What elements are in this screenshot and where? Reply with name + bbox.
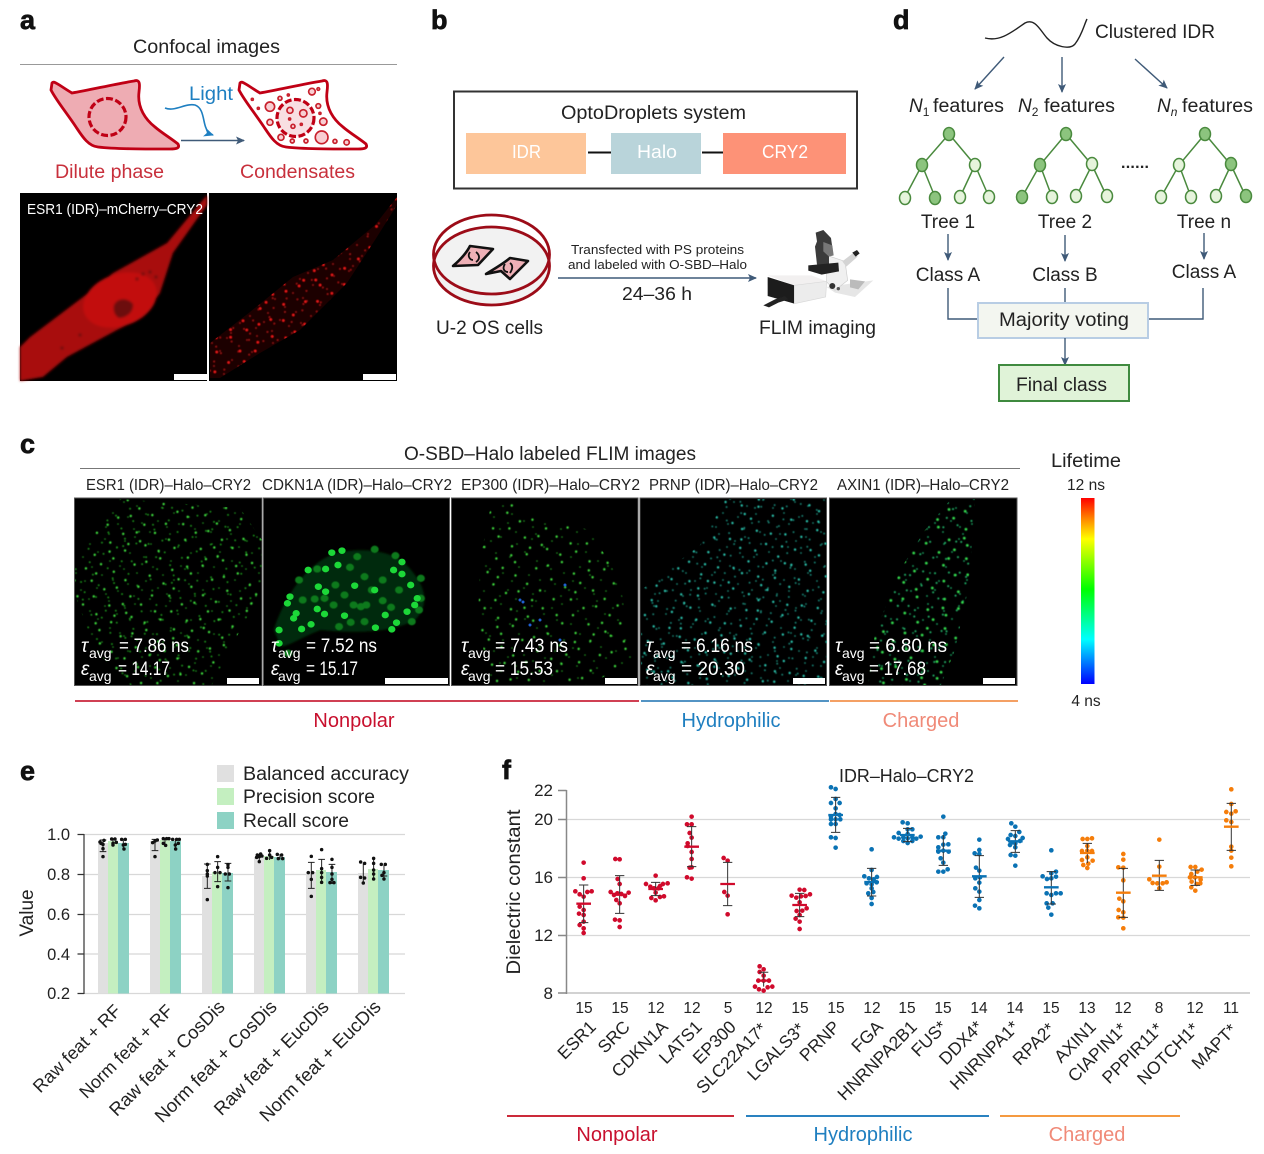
panel d: random forest workflow — [893, 5, 1253, 401]
x labels: EP300 — [689, 1017, 740, 1068]
stats: = 17.68 — [869, 659, 926, 680]
panel a: confocal images — [20, 5, 397, 381]
stats: = 7.52 ns — [306, 636, 377, 657]
x labels: SRC — [594, 1017, 634, 1057]
heading: Confocal images: Confocal images — [133, 37, 280, 58]
n labels: 13 — [1078, 1000, 1096, 1017]
feature labels: N — [1157, 96, 1171, 117]
y tick labels: 1.0 — [47, 826, 70, 844]
legend — [217, 764, 410, 832]
panel label b: b — [431, 5, 448, 35]
panel label c: c — [20, 429, 35, 459]
axis — [558, 790, 566, 994]
image column titles: PRNP (IDR)–Halo–CRY2 — [649, 477, 818, 494]
n labels: 5 — [724, 1000, 732, 1017]
x labels — [553, 1016, 1241, 1104]
box: final class: Final class — [1016, 375, 1107, 396]
stats — [835, 636, 947, 684]
stats: avg — [842, 668, 865, 684]
stats: = 15.17 — [306, 659, 358, 680]
x tick labels: Raw feat + RF — [29, 1001, 125, 1097]
caption: ESR1 mCherry: ESR1 (IDR)–mCherry–CRY2 — [27, 201, 203, 218]
feature labels — [909, 96, 1253, 119]
legend: Precision score — [243, 787, 375, 808]
stats: avg — [89, 668, 112, 684]
n labels: 14 — [970, 1000, 988, 1017]
scale bar — [793, 678, 825, 684]
stats: avg — [89, 645, 112, 661]
grid — [566, 820, 1250, 936]
heading: FLIM images: O-SBD–Halo labeled FLIM images — [404, 444, 696, 465]
tree 1 — [900, 128, 994, 204]
x labels: CDKN1A — [607, 1016, 672, 1081]
lifetime colour scale: 4 ns — [1071, 693, 1101, 710]
category bars: Nonpolar — [576, 1124, 658, 1146]
x labels: ESR1 — [553, 1017, 600, 1063]
system box: Halo — [637, 142, 677, 162]
x labels: PRNP — [795, 1017, 844, 1065]
panel label f: f — [502, 755, 512, 785]
image column titles: ESR1 (IDR)–Halo–CRY2 — [86, 477, 251, 494]
y tick labels: 20 — [534, 810, 553, 829]
ellipsis between trees: ...... — [1121, 155, 1149, 172]
panel b: OptoDroplets — [431, 5, 876, 339]
image: CDKN1A — [264, 498, 450, 686]
category bars: Hydrophilic — [814, 1124, 912, 1146]
n labels: 15 — [575, 1000, 593, 1017]
image: AXIN1 — [829, 498, 1017, 686]
arrow: to FLIM — [558, 277, 756, 279]
heading: OptoDroplets system: OptoDroplets system — [561, 103, 746, 124]
y tick labels — [47, 826, 70, 1003]
stats: = 20.30 — [681, 659, 745, 680]
x tick labels: Raw feat + EucDis — [209, 996, 333, 1119]
scale bar — [363, 374, 396, 380]
n labels: 15 — [791, 1000, 809, 1017]
n labels: 8 — [1155, 1000, 1163, 1017]
n labels: 15 — [898, 1000, 916, 1017]
x tick labels — [29, 996, 385, 1126]
icon: FLIM microscope — [763, 230, 873, 307]
stats: ε — [835, 659, 844, 680]
feature labels: n — [1171, 105, 1178, 119]
stats: = 6.80 ns — [869, 636, 947, 657]
bars — [98, 840, 389, 994]
n labels: 15 — [1042, 1000, 1060, 1017]
x labels: HNRNPA1* — [946, 1017, 1023, 1094]
image: condensates confocal — [209, 193, 397, 381]
y tick labels: 0.2 — [47, 985, 70, 1003]
x labels: NOTCH1* — [1133, 1019, 1203, 1089]
x tick labels: Norm feat + RF — [75, 1001, 177, 1102]
tree and class labels: Tree 1 — [921, 212, 975, 233]
y tick labels: 0.4 — [47, 946, 70, 964]
lifetime colour scale: 12 ns — [1067, 477, 1105, 494]
panel e: bar chart — [17, 756, 410, 1126]
system box — [454, 92, 857, 188]
x tick labels: Norm feat + EucDis — [255, 996, 385, 1126]
scale bar — [227, 678, 259, 684]
arrows: to features — [975, 57, 1167, 92]
icon: dilute phase cell — [51, 81, 179, 149]
hydrophilic swarm A — [828, 787, 879, 904]
y tick labels: 0.6 — [47, 906, 70, 924]
panel label d: d — [893, 5, 910, 35]
tree n — [1156, 128, 1252, 204]
n labels: 12 — [863, 1000, 881, 1017]
image: PRNP — [640, 498, 827, 686]
legend: Recall score — [243, 811, 349, 832]
tree and class labels — [916, 212, 1237, 286]
text: transfection — [568, 243, 747, 272]
image column titles: AXIN1 (IDR)–Halo–CRY2 — [837, 477, 1009, 494]
grid — [84, 834, 405, 994]
x labels: FGA — [847, 1016, 887, 1056]
x labels: LATS1 — [655, 1017, 706, 1068]
feature labels: N — [909, 96, 923, 117]
stats: = 15.53 — [495, 659, 553, 680]
stats: = 14.17 — [118, 659, 170, 680]
feature labels: N — [1018, 96, 1032, 117]
x labels: RPA2* — [1008, 1019, 1059, 1069]
x labels: FUS* — [907, 1017, 951, 1060]
error bars and data points — [100, 838, 387, 900]
stats — [271, 636, 377, 684]
stats: τ — [461, 636, 470, 657]
n labels: 12 — [1186, 1000, 1204, 1017]
x labels: CIAPIN1* — [1064, 1019, 1131, 1086]
stats — [81, 636, 189, 684]
category bars: Charged — [883, 710, 959, 732]
system box: IDR — [512, 142, 541, 162]
y axis title: Value — [17, 889, 38, 937]
y tick labels: 12 — [534, 926, 553, 945]
n labels: 11 — [1223, 1000, 1239, 1017]
lifetime colour scale — [1051, 451, 1121, 710]
feature labels: features — [1044, 96, 1115, 117]
stats: τ — [271, 636, 280, 657]
stats: ε — [461, 659, 470, 680]
x tick labels: Norm feat + CosDis — [150, 996, 281, 1126]
y tick labels: 22 — [534, 781, 553, 800]
x labels: MAPT* — [1187, 1020, 1241, 1073]
scale bar — [174, 374, 207, 380]
image column titles: CDKN1A (IDR)–Halo–CRY2 — [262, 477, 452, 494]
x labels: HNRNPA2B1 — [833, 1017, 921, 1104]
n labels: 12 — [1114, 1000, 1132, 1017]
legend: Balanced accuracy — [243, 764, 410, 785]
feature labels: 2 — [1032, 105, 1039, 119]
feature labels: features — [933, 96, 1004, 117]
image: EP300 — [451, 498, 638, 686]
icon: culture dish — [434, 215, 550, 305]
label: Dilute phase: Dilute phase — [55, 162, 164, 183]
feature labels: features — [1182, 96, 1253, 117]
image column titles: EP300 (IDR)–Halo–CRY2 — [461, 477, 640, 494]
tree and class labels: Tree 2 — [1038, 212, 1092, 233]
tree and class labels: Class A — [916, 265, 981, 286]
y tick labels: 16 — [534, 868, 553, 887]
box: majority voting — [978, 303, 1148, 338]
arrow: to final class — [1064, 338, 1066, 365]
n labels — [575, 1000, 1239, 1017]
image: ESR1 — [74, 498, 262, 686]
label: U-2 OS cells: U-2 OS cells — [436, 318, 543, 339]
n labels: 12 — [647, 1000, 665, 1017]
category bars — [507, 1116, 1180, 1146]
panel c: FLIM images — [20, 429, 1121, 732]
tree and class labels: Tree n — [1177, 212, 1231, 233]
x labels: LGALS3* — [743, 1019, 809, 1084]
stats: τ — [646, 636, 655, 657]
stats — [461, 636, 568, 684]
icon: condensates cell with droplets — [239, 81, 367, 149]
label: 24–36 h: 24–36 h — [622, 284, 692, 304]
label: FLIM imaging: FLIM imaging — [759, 318, 876, 339]
system box: CRY2 — [762, 142, 808, 162]
stats: = 7.86 ns — [119, 636, 189, 657]
category bars: Hydrophilic — [682, 710, 780, 732]
stats — [646, 636, 753, 684]
n labels: 15 — [827, 1000, 845, 1017]
x labels: PPPIR11* — [1098, 1019, 1167, 1088]
y tick labels — [534, 781, 553, 1003]
stats: avg — [468, 645, 491, 661]
n labels: 15 — [934, 1000, 952, 1017]
category bars — [75, 701, 1018, 732]
chart title: IDR–Halo–CRY2 — [839, 766, 974, 786]
stats: τ — [835, 636, 844, 657]
stats: ε — [81, 659, 90, 680]
stats: avg — [278, 668, 301, 684]
nonpolar swarm — [575, 817, 810, 991]
label: Condensates: Condensates — [240, 162, 355, 183]
panel label a: a — [20, 5, 36, 35]
tree and class labels: Class B — [1032, 265, 1098, 286]
n labels: 12 — [683, 1000, 701, 1017]
stats: avg — [653, 668, 676, 684]
y tick labels: 0.8 — [47, 866, 70, 884]
scale bar — [385, 678, 448, 684]
label: Clustered IDR: Clustered IDR — [1095, 22, 1215, 43]
connectors to majority voting — [948, 288, 1203, 319]
category bars: Charged — [1049, 1124, 1125, 1146]
hydrophilic swarm B — [894, 817, 1061, 915]
axis — [78, 834, 84, 994]
icon: clustered IDR curve — [985, 19, 1087, 47]
tree 2 — [1016, 128, 1112, 204]
stats: avg — [468, 668, 491, 684]
x tick labels: Raw feat + CosDis — [105, 996, 229, 1120]
y tick labels: 8 — [544, 984, 553, 1003]
scale bar — [605, 678, 637, 684]
stats: ε — [271, 659, 280, 680]
n labels: 15 — [611, 1000, 629, 1017]
category bars: Nonpolar — [313, 710, 395, 732]
n labels: 14 — [1006, 1000, 1024, 1017]
arrow: to condensates — [181, 140, 244, 142]
n labels: 12 — [755, 1000, 773, 1017]
text: transfection: and labeled with O-SBD–Halo — [568, 258, 747, 272]
stats: avg — [278, 645, 301, 661]
stats: avg — [842, 645, 865, 661]
arrows: tree to class — [948, 233, 1204, 261]
stats: = 6.16 ns — [681, 636, 753, 657]
box: majority voting: Majority voting — [999, 310, 1129, 331]
label: Light: Light — [189, 84, 234, 105]
image column titles — [86, 477, 1009, 494]
box: final class — [999, 365, 1129, 401]
charged swarm — [1080, 789, 1239, 928]
stats: ε — [646, 659, 655, 680]
arrow: light wave — [165, 105, 213, 135]
y axis title: Dielectric constant — [504, 809, 525, 974]
text: transfection: Transfected with PS proteins — [571, 243, 744, 257]
panel label e: e — [20, 756, 35, 786]
stats: = 7.43 ns — [495, 636, 568, 657]
stats: avg — [653, 645, 676, 661]
x labels: AXIN1 — [1050, 1017, 1100, 1067]
lifetime colour scale: Lifetime — [1051, 451, 1121, 472]
x labels: DDX4* — [935, 1017, 987, 1069]
feature labels: 1 — [923, 105, 930, 119]
x labels: SLC22A17* — [692, 1019, 771, 1098]
image: dilute phase confocal — [20, 193, 207, 381]
panel f: dielectric constant swarm plot — [502, 755, 1250, 1146]
stats: τ — [81, 636, 90, 657]
scale bar — [983, 678, 1015, 684]
tree and class labels: Class A — [1172, 262, 1237, 283]
